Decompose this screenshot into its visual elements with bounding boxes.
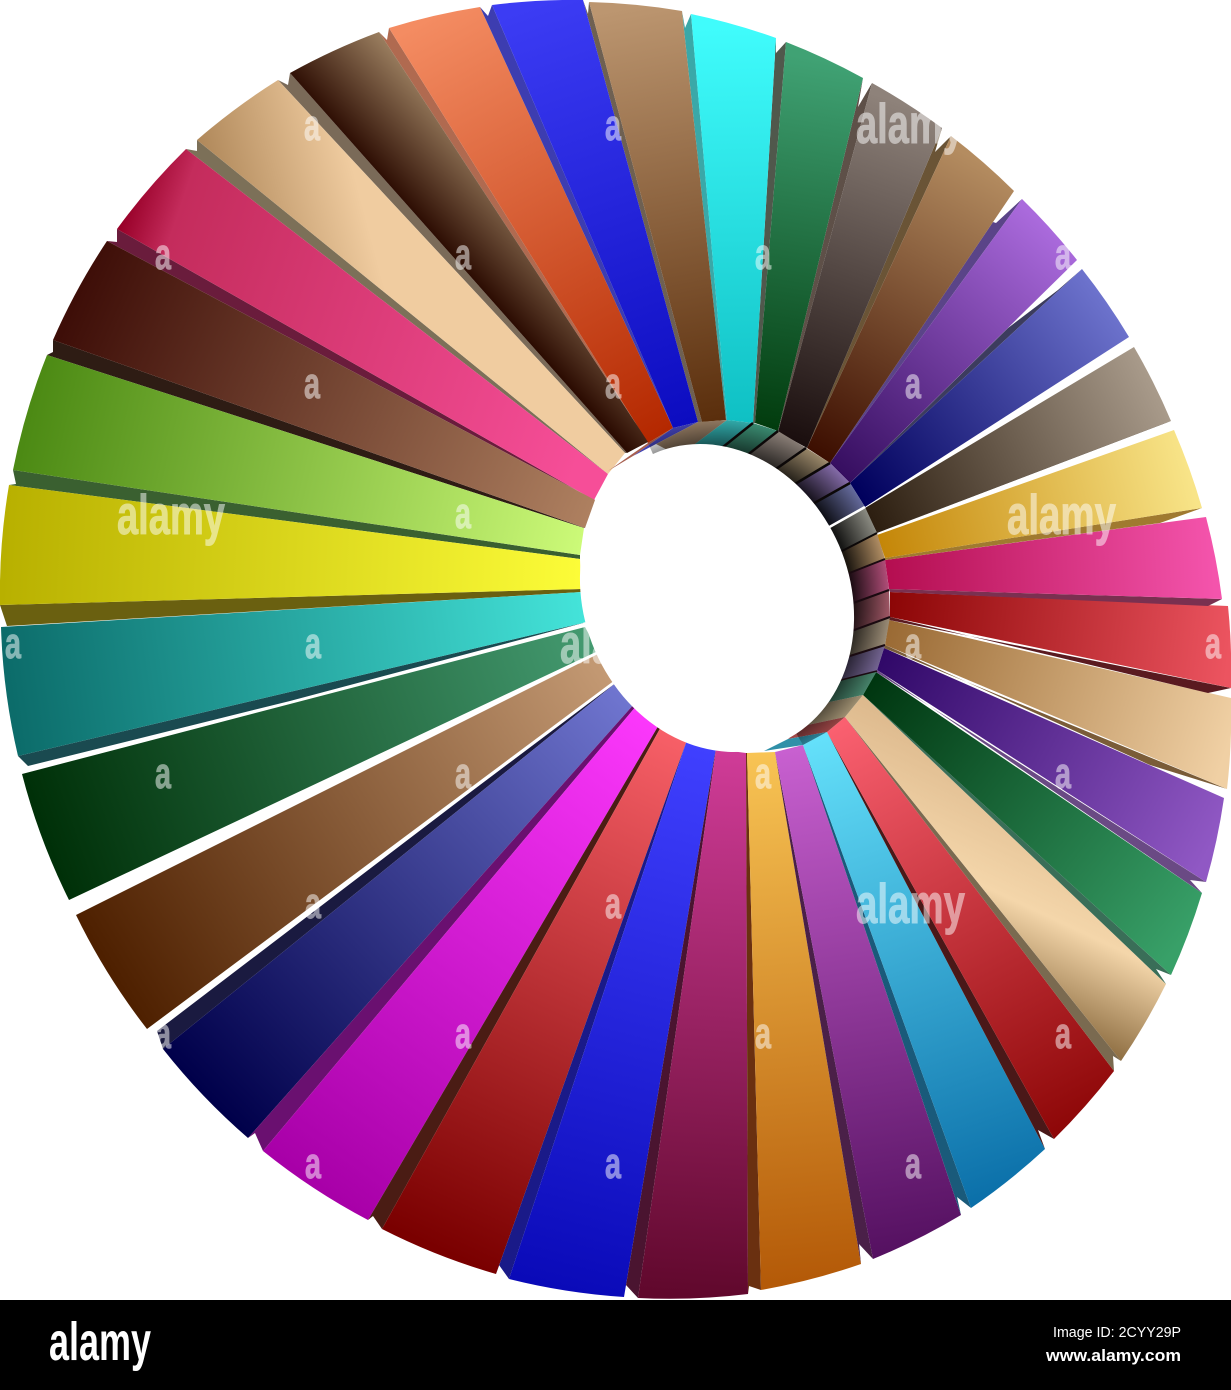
wedge: red lower right bbox=[827, 717, 1114, 1149]
watermarks: a bbox=[304, 101, 320, 150]
watermarks: a bbox=[605, 101, 621, 150]
watermarks: a bbox=[1055, 749, 1071, 798]
watermarks: a bbox=[1055, 1009, 1071, 1058]
footer bar bbox=[0, 1300, 1231, 1390]
watermarks: a bbox=[455, 749, 471, 798]
watermarks: alamy bbox=[856, 92, 964, 155]
wedge: pink right bbox=[885, 517, 1222, 606]
website: www.alamy.com bbox=[1045, 1346, 1181, 1365]
wedge: tan lower right bbox=[845, 695, 1166, 1071]
wedge: green right bbox=[863, 672, 1202, 984]
watermarks: a bbox=[1055, 230, 1071, 279]
wedge: orange bbox=[746, 752, 861, 1294]
wedge: brown lower left bbox=[76, 654, 615, 1029]
wedge: teal bbox=[1, 592, 587, 766]
wedge: purple bottom bbox=[775, 745, 961, 1264]
watermarks: a bbox=[905, 1139, 921, 1188]
centre hole bbox=[533, 401, 901, 795]
wedge: red right bbox=[889, 592, 1231, 693]
wedge: sky blue bbox=[803, 732, 1045, 1215]
wedge: orange red bbox=[379, 7, 673, 443]
watermarks: a bbox=[605, 1139, 621, 1188]
wedge: yellow gold bbox=[877, 430, 1202, 560]
wedge: magenta bbox=[248, 703, 660, 1220]
wedge: pink upper left bbox=[107, 149, 608, 500]
wedge: cyan bbox=[682, 11, 776, 423]
watermarks: a bbox=[455, 1009, 471, 1058]
watermarks: a bbox=[605, 359, 621, 408]
wedge: tan upper left bbox=[186, 80, 625, 474]
wedge: green top bbox=[753, 38, 863, 431]
wedge: grey bbox=[778, 78, 942, 448]
watermarks: alamy bbox=[117, 483, 225, 546]
wedge: light green bbox=[9, 355, 584, 559]
wedge: maroon bbox=[624, 748, 748, 1299]
watermarks: a bbox=[305, 879, 321, 928]
wedge: light brown top bbox=[583, 0, 726, 422]
footer logo: alamy bbox=[49, 1312, 151, 1372]
wedge: red bottom bbox=[368, 723, 687, 1274]
wedge: purple upper right bbox=[830, 199, 1077, 483]
wedge: grey brown bbox=[865, 347, 1171, 533]
wedge: yellow bbox=[0, 485, 582, 626]
wedge: blue top bbox=[480, 0, 698, 428]
wedge: tan right bbox=[884, 620, 1231, 789]
wedge: brown upper right bbox=[807, 128, 1014, 463]
wedge: blue bottom bbox=[496, 740, 716, 1297]
watermarks: a bbox=[305, 619, 321, 668]
watermarks: a bbox=[455, 489, 471, 538]
watermarks: a bbox=[905, 359, 921, 408]
image id: Image ID: 2CYY29P bbox=[1053, 1324, 1181, 1341]
wedge: navy lower left bbox=[157, 682, 635, 1138]
wedge: dark brown top bbox=[278, 32, 648, 453]
watermarks: a bbox=[304, 359, 320, 408]
watermarks: a bbox=[755, 1009, 771, 1058]
watermarks: a bbox=[755, 230, 771, 279]
watermarks: a bbox=[155, 230, 171, 279]
watermarks: a bbox=[455, 230, 471, 279]
wedge: dark green left bbox=[22, 627, 598, 900]
wedge: navy upper right bbox=[850, 269, 1129, 507]
watermarks: alamy bbox=[856, 872, 965, 935]
wedge: purple right bbox=[876, 648, 1224, 893]
watermarks: a bbox=[755, 749, 771, 798]
watermarks: alamy bbox=[560, 612, 668, 675]
watermarks: a bbox=[905, 619, 921, 668]
inner wall of the ring bbox=[608, 420, 890, 751]
wedge: brown left bbox=[47, 241, 595, 528]
watermarks bbox=[5, 92, 1221, 1188]
watermarks: a bbox=[1205, 619, 1221, 668]
watermarks: a bbox=[305, 1139, 321, 1188]
watermarks: a bbox=[605, 879, 621, 928]
watermarks: a bbox=[155, 1009, 171, 1058]
watermarks: a bbox=[155, 749, 171, 798]
watermarks: a bbox=[5, 619, 21, 668]
watermarks: alamy bbox=[1007, 483, 1116, 546]
